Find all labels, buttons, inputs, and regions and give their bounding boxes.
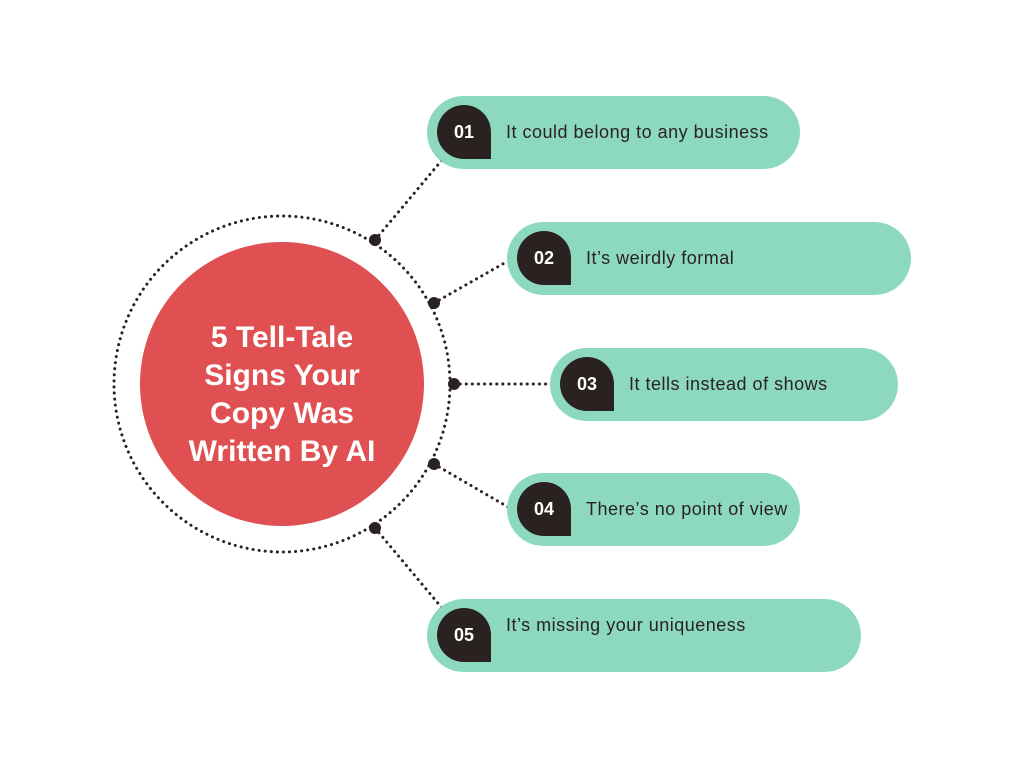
item 05: It’s missing your uniqueness <box>506 615 746 635</box>
title circle <box>140 242 424 526</box>
item 02 <box>507 222 911 295</box>
title circle: Written By AI <box>189 435 375 468</box>
item 03 <box>550 348 898 421</box>
title circle: Signs Your <box>204 359 360 392</box>
item 04: There’s no point of view <box>586 499 788 519</box>
item 01: It could belong to any business <box>506 122 769 142</box>
item 02: It’s weirdly formal <box>586 248 734 268</box>
title circle: Copy Was <box>210 397 354 430</box>
item 03: 03 <box>577 374 597 394</box>
item 03: It tells instead of shows <box>629 374 828 394</box>
item 04 <box>507 473 800 546</box>
item 02: 02 <box>534 248 554 268</box>
item 01 <box>427 96 800 169</box>
item 01: 01 <box>454 122 474 142</box>
item 05 <box>427 599 861 672</box>
title circle: 5 Tell-Tale <box>211 321 353 354</box>
item 04: 04 <box>534 499 554 519</box>
item 05: 05 <box>454 625 474 645</box>
